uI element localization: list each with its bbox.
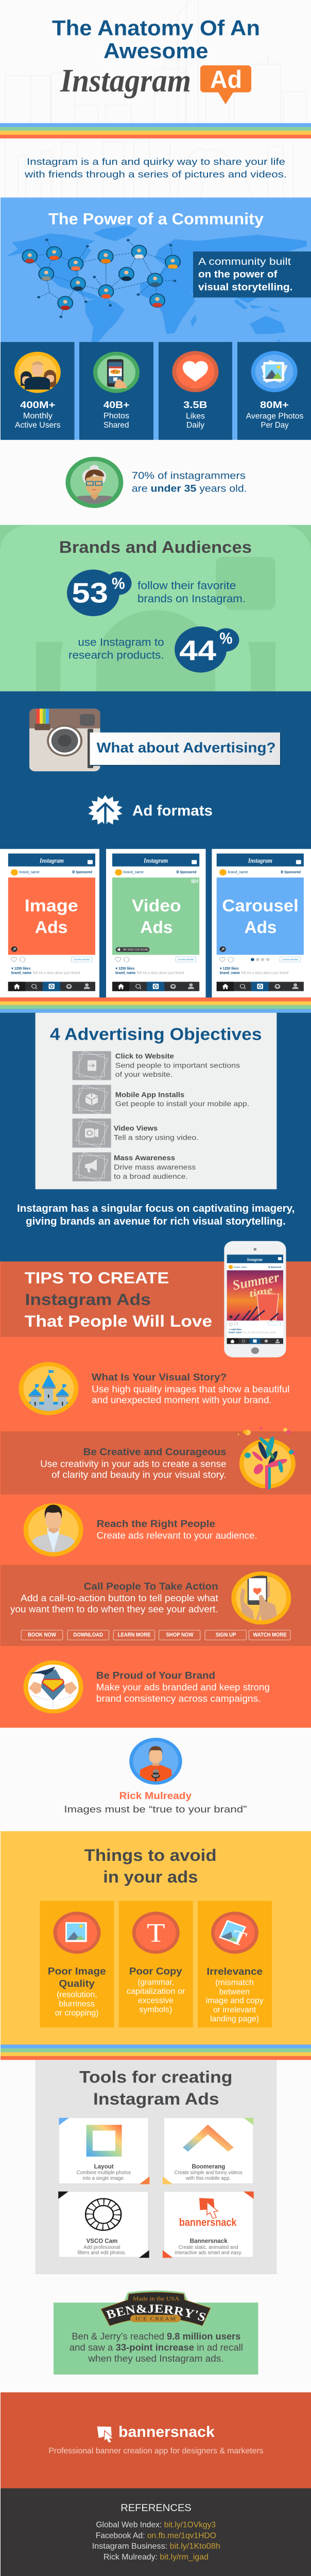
header section	[0, 0, 311, 197]
card: image ads: Ads	[35, 917, 67, 937]
stat: 44 percent: use Instagram to	[78, 636, 164, 648]
card: poor image quality: (resolution,	[57, 1990, 97, 1999]
card: poor image quality: blurriness	[59, 1999, 95, 2008]
objective: click to website: Click to Website	[115, 1052, 174, 1060]
panel: the power of a community	[1, 197, 311, 440]
intro text	[24, 157, 287, 180]
call to action buttons: SHOP NOW	[166, 1631, 194, 1638]
card: carousel ads: Instagram	[248, 857, 272, 864]
card: poor image quality: or cropping)	[55, 2008, 98, 2018]
tool: layout: Combine multiple photos	[77, 2171, 131, 2176]
stat: 53 percent: %	[112, 574, 125, 593]
statement text	[17, 1202, 295, 1227]
case study text: when they used Instagram ads.	[88, 2353, 224, 2364]
card: poor copy: symbols)	[139, 2005, 172, 2014]
stat: average photos per day: Per Day	[261, 420, 289, 430]
objective: click to website: of your website.	[115, 1071, 172, 1079]
stat: 53 percent: 53	[72, 578, 108, 609]
stat: likes daily	[159, 342, 232, 440]
card: irrelevance: between	[219, 1987, 250, 1996]
card: irrelevance: landing page)	[210, 2014, 259, 2023]
panel: brands and audiences	[0, 525, 311, 691]
objective: click to website	[73, 1051, 240, 1080]
stat: photos shared	[79, 342, 153, 440]
references: Facebook Ad: on.fb.me/1qv1HDO	[96, 2531, 216, 2540]
card: image ads: Instagram	[39, 857, 64, 864]
tool: vsco cam: VSCO Cam	[87, 2237, 117, 2244]
panel: advertising objectives backdrop	[0, 1013, 311, 1262]
tip 2: be creative: of clarity and beauty in your visual story.	[51, 1470, 227, 1480]
objective: mobile app installs: Get people to install your mobile app.	[115, 1100, 249, 1108]
tip 2: be creative	[1, 1427, 311, 1495]
callout: under 35 years old	[65, 457, 247, 508]
tool: boomerang: Create simple and funny videos	[175, 2171, 243, 2176]
user avatars	[22, 245, 180, 310]
references: Global Web Index: bit.ly/1OVkgy3	[96, 2520, 216, 2529]
quote: rick mulready: Images must be “true to your brand”	[64, 1804, 247, 1815]
objective: video views: Tell a story using video.	[114, 1134, 199, 1142]
card: carousel ads: brand_name	[228, 870, 248, 874]
stat: 53 percent: follow their favorite	[137, 579, 236, 591]
stat: monthly active users: Active Users	[15, 420, 61, 430]
card: carousel ads: Tell me a story about your brand.	[241, 971, 289, 975]
panel: tips	[0, 1241, 311, 1727]
heading: Instagram Ads	[93, 2090, 219, 2108]
heading	[84, 1846, 217, 1886]
tool: layout: into a single image.	[83, 2176, 125, 2181]
call to action buttons: DOWNLOAD	[73, 1631, 103, 1638]
tool: boomerang	[163, 2118, 253, 2184]
intro text: Instagram is a fun and quirky way to share your life	[27, 157, 285, 167]
objective: mass awareness: Mass Awareness	[114, 1154, 175, 1162]
heading: Things to avoid	[84, 1846, 217, 1865]
card: carousel ads: ♥ 1250 likes	[220, 966, 239, 971]
objective: video views	[73, 1118, 199, 1148]
tip 4: call to action	[1, 1565, 311, 1646]
stat: 44 percent	[68, 626, 239, 672]
card: carousel ads: LEARN MORE	[282, 958, 299, 961]
heading: 4 Advertising Objectives	[50, 1024, 262, 1044]
logo: ben and jerry's: ICE CREAM	[135, 2316, 176, 2322]
tip 3: reach the right people	[24, 1503, 257, 1556]
card: carousel ads: Carousel	[222, 895, 299, 916]
stat: likes daily: Likes	[186, 411, 205, 420]
card: video ads: Tell me a story about your brand.	[136, 971, 185, 975]
card: poor copy: capitalization or	[127, 1987, 185, 1996]
heading: ad formats: Ad formats	[132, 803, 213, 819]
tool: bannersnack	[163, 2192, 254, 2258]
heading: tips to create	[25, 1269, 212, 1331]
card: carousel ads: brand_name	[220, 971, 240, 975]
card: video ads: Video	[132, 895, 181, 916]
card: poor image quality	[40, 1901, 114, 2027]
logo: ben and jerry's	[101, 2292, 211, 2326]
tip 1: visual story: Use high quality images that show a beautiful	[92, 1384, 289, 1395]
card: video ads: LEARN MORE	[178, 958, 194, 961]
card: video ads: ⚙ Sponsored	[176, 870, 196, 874]
card: irrelevance: Irrelevance	[206, 1967, 263, 1977]
tool: layout	[59, 2118, 149, 2184]
stat: photos shared: Photos	[103, 411, 129, 420]
footer: bannersnack	[1, 2393, 311, 2488]
icon: superhero shirt	[24, 1660, 83, 1714]
objective: click to website: Send people to important sections	[115, 1061, 240, 1070]
tip 4: call to action: Call People To Take Action	[84, 1581, 218, 1592]
tool: vsco cam: Add professional	[83, 2245, 120, 2250]
objective: mass awareness: to a broad audience.	[114, 1173, 188, 1181]
stat: 44 percent: 44	[179, 635, 216, 666]
call to action buttons: LEARN MORE	[118, 1631, 150, 1638]
objective: mass awareness	[73, 1153, 196, 1181]
stat: 44 percent: research products.	[68, 649, 164, 661]
tip 5: be proud of your brand: brand consistency across campaigns.	[96, 1693, 261, 1704]
panel: advertising	[0, 691, 311, 1013]
stat: likes daily: Daily	[186, 420, 205, 430]
references	[1, 2488, 311, 2576]
icon: man in suit	[24, 1503, 83, 1556]
card: poor image quality: Quality	[59, 1979, 95, 1989]
card: carousel ads: ⚙ Sponsored	[281, 870, 301, 874]
panel: things to avoid	[1, 1831, 311, 2045]
tip 4: call to action: Add a call-to-action button to tell people what	[21, 1593, 218, 1604]
panel: tools	[36, 2060, 277, 2274]
heading: tips to create: Instagram Ads	[25, 1291, 151, 1309]
card: video ads: Instagram	[143, 857, 168, 864]
card: poor copy	[119, 1901, 193, 2027]
card: carousel ads: Ads	[245, 917, 277, 937]
card: video ads: brand_name	[115, 971, 135, 975]
card: image ads: ⚙ Sponsored	[72, 870, 92, 874]
tip 3: reach the right people: Create ads relevant to your audience.	[97, 1531, 257, 1541]
phone mockup: brand_name	[234, 1266, 247, 1269]
stat: average photos per day: 80M+	[260, 400, 289, 411]
objective: mobile app installs: Mobile App Installs	[115, 1091, 184, 1099]
icon: instagram camera	[29, 709, 100, 771]
heading: Tools for creating	[79, 2067, 232, 2087]
logo: ben and jerry's: BEN&JERRY'S	[105, 2302, 208, 2324]
logo: bannersnack: bannersnack	[118, 2424, 215, 2441]
title	[52, 16, 260, 63]
card: video ads: brand_name	[124, 870, 144, 874]
references: Rick Mulready: bit.ly/rm_igad	[103, 2552, 209, 2562]
statement text: Instagram has a singular focus on captivating imagery,	[17, 1202, 295, 1214]
case study text: Ben & Jerry’s reached 9.8 million users	[72, 2331, 240, 2342]
tool: vsco cam	[58, 2192, 149, 2258]
card: poor copy: excessive	[138, 1996, 174, 2005]
stat: photos shared: Shared	[103, 420, 129, 430]
intro text: with friends through a series of pictures and videos.	[24, 170, 287, 180]
references: Instagram Business: bit.ly/1Kto08h	[92, 2541, 220, 2551]
statement text: giving brands an avenue for rich visual storytelling.	[26, 1215, 286, 1227]
phone mockup: Summer	[231, 1270, 281, 1293]
case study: ben and jerry's	[54, 2291, 258, 2375]
logo: bannersnack	[97, 2424, 215, 2443]
call to action buttons	[21, 1630, 290, 1640]
rainbow stripe	[0, 997, 311, 1013]
card: irrelevance: image and copy	[206, 1996, 264, 2005]
icon: creative splash	[238, 1427, 296, 1489]
card: image ads: ♥ 1250 likes	[11, 966, 30, 971]
script word: Instagram: Instagram	[60, 62, 191, 99]
tool: bannersnack: interactive ads smart and easy.	[175, 2250, 242, 2256]
logo: ben and jerry's: Made in the USA	[133, 2295, 180, 2302]
phone mockup: time	[248, 1284, 274, 1299]
stat: monthly active users: 400M+	[20, 400, 56, 411]
stat: average photos per day	[237, 342, 311, 440]
heading label: what about advertising	[90, 733, 281, 766]
card: poor copy: Poor Copy	[129, 1966, 182, 1977]
quote: rick mulready: Rick Mulready	[119, 1790, 192, 1802]
stat: 44 percent: %	[219, 629, 232, 648]
card: image ads	[0, 849, 99, 997]
footer: bannersnack: Professional banner creation app for designers & marketers	[48, 2446, 264, 2455]
tip 1: visual story: and unexpected moment with your brand.	[92, 1395, 272, 1405]
card: image ads: brand_name	[20, 870, 40, 874]
title: The Anatomy Of An	[52, 16, 260, 40]
heading: Brands and Audiences	[59, 538, 252, 556]
tool: layout: Layout	[94, 2163, 114, 2170]
phone mockup: Here you should insert your caption	[242, 1331, 277, 1334]
references: REFERENCES	[120, 2502, 192, 2514]
call to action buttons: BOOK NOW	[28, 1631, 57, 1638]
tip 2: be creative: Be Creative and Courageous	[83, 1447, 227, 1458]
stat: 53 percent: brands on Instagram.	[137, 592, 246, 604]
card: video ads	[106, 849, 206, 997]
card: irrelevance: or irrelevant	[213, 2005, 256, 2014]
heading: tips to create: TIPS TO CREATE	[25, 1269, 169, 1287]
tool: bannersnack: Create static, animated and	[179, 2245, 238, 2250]
card: irrelevance: T	[229, 1925, 249, 1951]
panel: 4 advertising objectives	[36, 1013, 277, 1189]
tool: vsco cam: filters and edit photos.	[78, 2250, 126, 2256]
stat: 53 percent	[67, 570, 246, 616]
tool: boomerang: with this mobile app.	[185, 2176, 231, 2181]
card: poor copy: T	[147, 1918, 165, 1947]
card: poor image quality: Poor Image	[48, 1966, 106, 1977]
objective: mobile app installs	[73, 1085, 249, 1114]
icon: speaker	[129, 1738, 182, 1785]
call to action buttons: WATCH MORE	[253, 1631, 287, 1638]
callout: visual storytelling: on the power of	[198, 269, 278, 280]
callout: under 35 years old: are under 35 years old.	[132, 483, 247, 494]
card: irrelevance: (mismatch	[215, 1978, 254, 1987]
phone mockup	[224, 1241, 286, 1358]
rainbow stripe	[1, 2044, 311, 2060]
case study text: and saw a 33-point increase in ad recall	[70, 2343, 243, 2353]
card: image ads: Tell me a story about your brand.	[32, 971, 81, 975]
stat: average photos per day: Average Photos	[246, 412, 303, 420]
card: irrelevance	[198, 1901, 272, 2027]
speech bubble: Ad: Ad	[210, 65, 242, 93]
tip 2: be creative: Use creativity in your ads to create a sense	[40, 1459, 227, 1469]
card: video ads: Ads	[140, 917, 173, 937]
phone mockup: brand_name	[229, 1331, 241, 1334]
card: poor copy: (grammar,	[137, 1977, 174, 1987]
heading: The Power of a Community	[48, 210, 264, 228]
tool: bannersnack: Bannersnack	[190, 2237, 228, 2244]
stat: likes daily: 3.5B	[183, 400, 208, 411]
title: Awesome	[103, 39, 209, 63]
callout: visual storytelling: visual storytelling.	[198, 282, 292, 293]
call to action buttons: SIGN UP	[216, 1631, 236, 1638]
tip 1: visual story	[19, 1362, 289, 1415]
rainbow stripe	[0, 123, 311, 139]
tip 3: reach the right people: Reach the Right People	[97, 1518, 215, 1530]
network links and nodes	[30, 239, 176, 318]
card: image ads: LEARN MORE	[74, 958, 90, 961]
card: carousel ads	[212, 849, 311, 997]
heading: in your ads	[103, 1868, 198, 1886]
quote: rick mulready	[64, 1738, 247, 1815]
world map	[6, 226, 311, 342]
icon: hands with phone	[231, 1571, 291, 1625]
card: image ads: Image	[25, 895, 78, 916]
phone mockup: Instagram	[247, 1257, 263, 1262]
tool: bannersnack: bannersnack	[179, 2216, 237, 2228]
stat: monthly active users	[1, 342, 74, 440]
heading	[79, 2067, 233, 2108]
objective: video views: Video Views	[114, 1124, 158, 1132]
stat: monthly active users: Monthly	[23, 411, 53, 420]
callout: under 35 years old: 70% of instagrammers	[132, 470, 246, 481]
card: video ads: ♥ 1250 likes	[115, 966, 134, 971]
tool: boomerang: Boomerang	[192, 2163, 225, 2170]
callout: visual storytelling	[193, 251, 311, 297]
tip 5: be proud of your brand: Make your ads branded and keep strong	[96, 1682, 270, 1693]
tip 1: visual story: What Is Your Visual Story?	[92, 1372, 227, 1383]
speech bubble: Ad	[200, 65, 251, 104]
icon: castle	[19, 1362, 78, 1415]
phone mockup: ⚙ Sponsored	[268, 1266, 281, 1269]
tip 4: call to action: you want them to do when they see your advert.	[10, 1604, 218, 1615]
callout: visual storytelling: A community built	[198, 257, 291, 267]
heading: tips to create: That People Will Love	[25, 1312, 212, 1331]
objective: mass awareness: Drive mass awareness	[114, 1163, 196, 1172]
phone mockup: ♥ 1250 likes	[229, 1328, 241, 1331]
tip 5: be proud of your brand	[24, 1660, 270, 1714]
case study text	[70, 2331, 243, 2364]
heading label: what about advertising: What about Advertising?	[97, 740, 276, 756]
icon: upload star badge	[88, 795, 123, 826]
card: image ads: brand_name	[11, 971, 31, 975]
card: video ads: TAP VIDEO FOR SOUND	[123, 948, 148, 952]
tip 5: be proud of your brand: Be Proud of Your Brand	[96, 1670, 215, 1681]
stat: photos shared: 40B+	[103, 400, 129, 411]
